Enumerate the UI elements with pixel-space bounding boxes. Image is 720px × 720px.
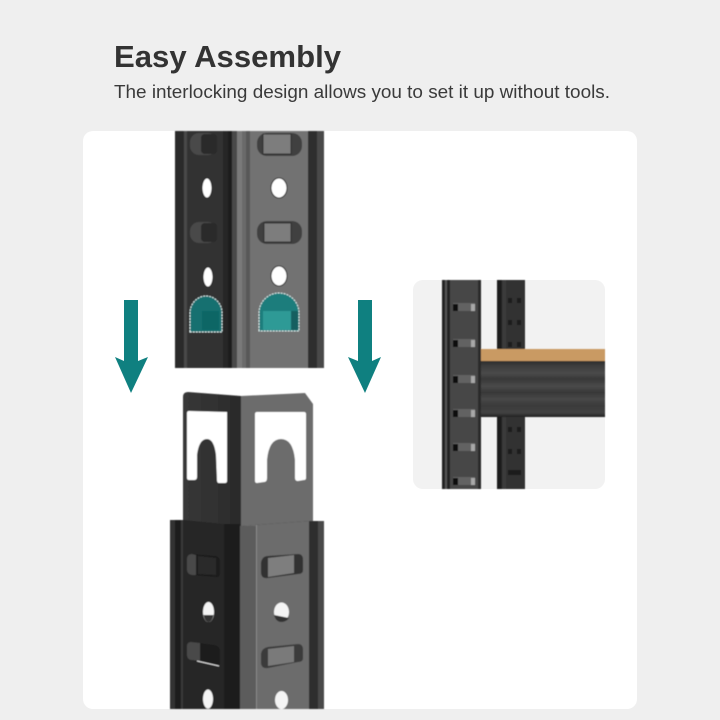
wooden board bbox=[481, 349, 605, 361]
holes bbox=[202, 178, 287, 287]
post tab top bbox=[183, 392, 313, 526]
inset panel: assembled shelf bbox=[413, 280, 605, 489]
right slots bbox=[257, 133, 302, 244]
panel: white card bbox=[83, 131, 637, 709]
arrow: right down bbox=[348, 300, 381, 393]
lower sleeve bbox=[170, 520, 324, 709]
metal beam bbox=[481, 361, 605, 417]
title: Easy Assembly bbox=[114, 39, 342, 74]
sleeve slots bbox=[187, 554, 303, 668]
sleeve holes bbox=[203, 602, 289, 709]
upper post photo bbox=[175, 131, 324, 368]
left slots bbox=[190, 133, 217, 243]
subtitle: The interlocking design allows you to set it up without tools. bbox=[114, 82, 610, 102]
back post bbox=[497, 280, 525, 489]
lower post photo bbox=[170, 392, 324, 709]
front post bbox=[442, 280, 481, 489]
teal highlight: right tab bbox=[259, 293, 299, 331]
arrow: left down bbox=[115, 300, 148, 393]
teal highlight: left tab bbox=[190, 296, 222, 332]
